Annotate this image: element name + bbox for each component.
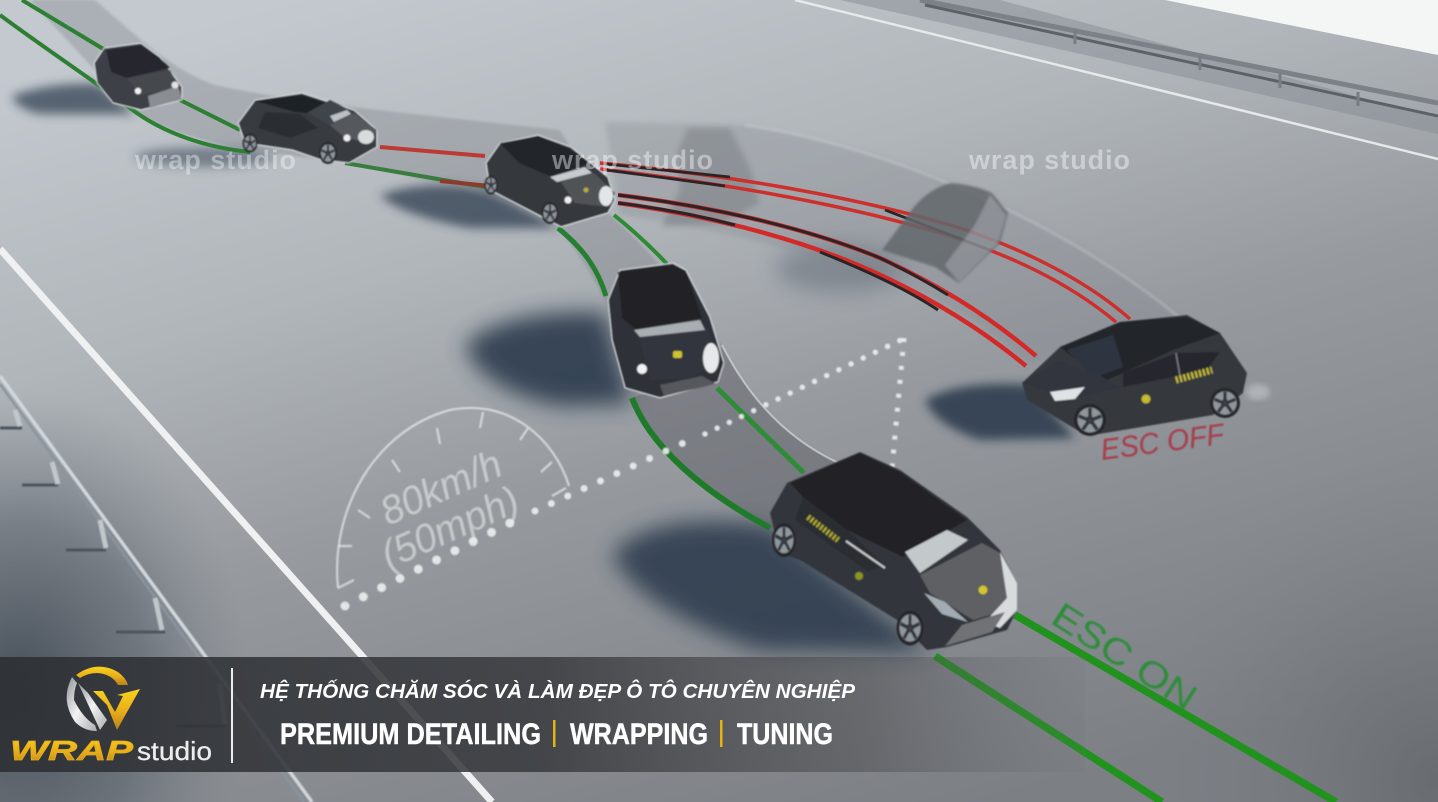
logo divider <box>231 668 233 763</box>
watermark: left: wrap studio <box>134 145 297 175</box>
logo mark <box>67 667 140 731</box>
swept path band: ESC on <box>30 0 860 530</box>
label: ESC ON: ESC ON <box>1045 594 1205 718</box>
speed reading <box>358 442 526 578</box>
services line: PREMIUM DETAILING <box>280 718 541 751</box>
car 3 <box>484 135 615 227</box>
dotted speed line <box>345 338 905 606</box>
guard rail, bottom left <box>0 376 312 802</box>
speed reading: 80km/h <box>374 442 509 534</box>
speedometer dial <box>337 408 569 588</box>
car 2 <box>238 93 377 164</box>
car shadows <box>12 84 1075 652</box>
lane marking: long white line <box>0 249 492 802</box>
watermark: right: wrap studio <box>968 145 1131 175</box>
car 5: ESC on <box>770 452 1017 650</box>
car 6: ESC off <box>1022 315 1270 436</box>
services line: TUNING <box>737 718 833 751</box>
logo wordmark: studio: studio <box>137 736 212 766</box>
ghost car 2 on ESC off path <box>882 183 1008 283</box>
services line: WRAPPING <box>570 718 708 751</box>
services line <box>280 718 833 751</box>
watermark: centre: wrap studio <box>551 145 714 175</box>
ghost car 1 on ESC off path <box>661 128 759 227</box>
footer banner <box>0 657 1085 772</box>
logo <box>10 667 212 766</box>
car 4 <box>608 263 724 398</box>
logo wordmark: WRAP: WRAP <box>10 735 133 766</box>
speed reading: (50mph) <box>375 478 526 578</box>
swept path band: ESC off <box>605 122 1180 365</box>
car 1, top left <box>94 43 182 110</box>
label: ESC OFF: ESC OFF <box>1099 418 1227 467</box>
lane marking and guard rail, top right <box>795 0 1438 159</box>
red tracks: ESC off path <box>380 147 1130 366</box>
tagline: HỆ THỐNG CHĂM SÓC VÀ LÀM ĐẸP Ô TÔ CHUYÊN NGHIỆP <box>260 679 856 703</box>
